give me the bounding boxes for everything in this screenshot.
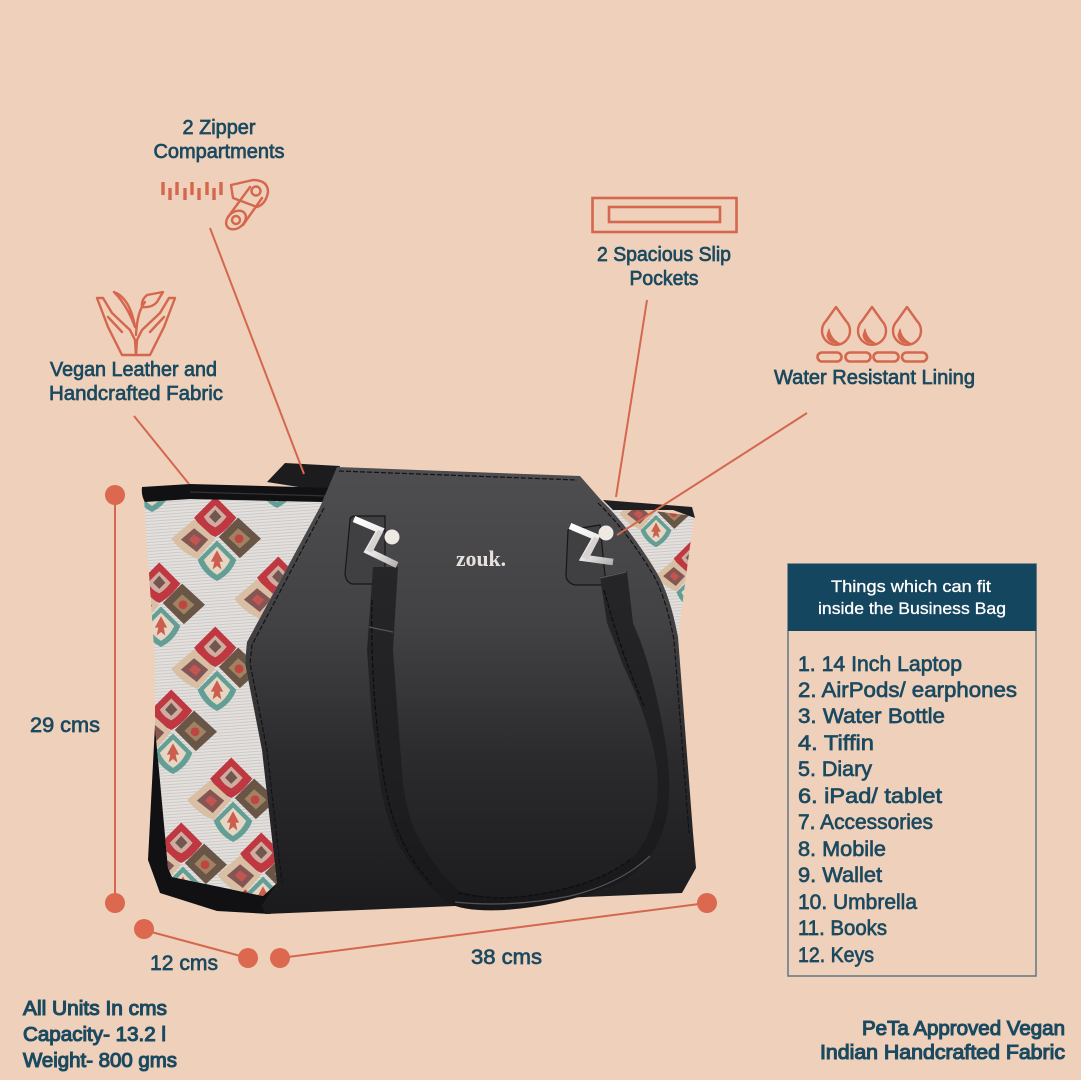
- icon: hands and leaf: [97, 292, 175, 355]
- item list: 8. Mobile: [798, 837, 886, 861]
- stitching: [250, 471, 689, 883]
- panel header: Things which can fit: [831, 577, 991, 596]
- item list: [798, 652, 1017, 967]
- top binding left: [142, 484, 335, 502]
- icon: slip pocket: [592, 198, 736, 232]
- icon: water drops: [818, 307, 927, 362]
- specs text: Capacity- 13.2 l: [23, 1024, 166, 1046]
- front panel: [245, 467, 696, 914]
- item list: 10. Umbrella: [798, 890, 917, 914]
- label: slip pockets: 2 Spacious Slip: [597, 244, 731, 266]
- right Z hardware: [570, 526, 614, 562]
- back panel top: [267, 463, 340, 492]
- label: 2 zipper compartments: 2 Zipper: [182, 117, 256, 139]
- panel outline: [788, 564, 1036, 976]
- vegan note: Indian Handcrafted Fabric: [820, 1042, 1065, 1064]
- right fabric gusset: [606, 505, 694, 636]
- item list: 1. 14 Inch Laptop: [798, 652, 962, 676]
- top binding right: [603, 500, 695, 518]
- label: 2 zipper compartments: Compartments: [154, 141, 284, 163]
- dimension: height 29 cms: [30, 485, 125, 913]
- panel header: [788, 564, 1036, 631]
- item list: 9. Wallet: [798, 863, 882, 887]
- item list: 11. Books: [798, 916, 887, 940]
- bag: [106, 424, 727, 974]
- dimension: depth 12 cms: [134, 919, 258, 975]
- item list: 12. Keys: [798, 943, 874, 967]
- item list: 4. Tiffin: [798, 731, 874, 755]
- label: vegan leather: [49, 359, 223, 405]
- specs text: All Units In cms: [23, 998, 167, 1020]
- dimension: width 38 cms: [270, 893, 717, 969]
- right tab: [566, 525, 606, 585]
- vegan note: PeTa Approved Vegan: [862, 1018, 1065, 1040]
- callout leader lines: [134, 228, 807, 535]
- panel: things which can fit: [788, 564, 1036, 976]
- label: slip pockets: [597, 244, 731, 290]
- label: vegan leather: Handcrafted Fabric: [49, 383, 223, 405]
- dimension: height 29 cms: 29 cms: [30, 713, 100, 737]
- vegan note: [820, 1018, 1065, 1064]
- item list: 7. Accessories: [798, 810, 933, 834]
- item list: 3. Water Bottle: [798, 704, 945, 728]
- label: vegan leather: Vegan Leather and: [50, 359, 217, 381]
- label: slip pockets: Pockets: [630, 268, 698, 290]
- icon: zipper: [163, 180, 268, 233]
- left Z hardware: [354, 519, 400, 565]
- zouk logo: zouk.: [456, 546, 506, 571]
- item list: 5. Diary: [798, 757, 872, 781]
- left tab: [345, 516, 385, 584]
- label: 2 zipper compartments: [154, 117, 284, 163]
- label: water resistant lining: Water Resistant Lining: [774, 367, 975, 389]
- item list: 6. iPad/ tablet: [798, 784, 942, 808]
- lower left black gusset: [148, 725, 285, 914]
- dimension: width 38 cms: 38 cms: [471, 945, 542, 969]
- specs text: Weight- 800 gms: [23, 1050, 177, 1072]
- strap edge lines: [372, 590, 644, 898]
- item list: 2. AirPods/ earphones: [798, 678, 1017, 702]
- dimension: depth 12 cms: 12 cms: [150, 951, 218, 975]
- left fabric gusset: [144, 499, 322, 896]
- specs text: [23, 998, 177, 1072]
- straps: [367, 567, 669, 910]
- panel header: inside the Business Bag: [818, 599, 1006, 618]
